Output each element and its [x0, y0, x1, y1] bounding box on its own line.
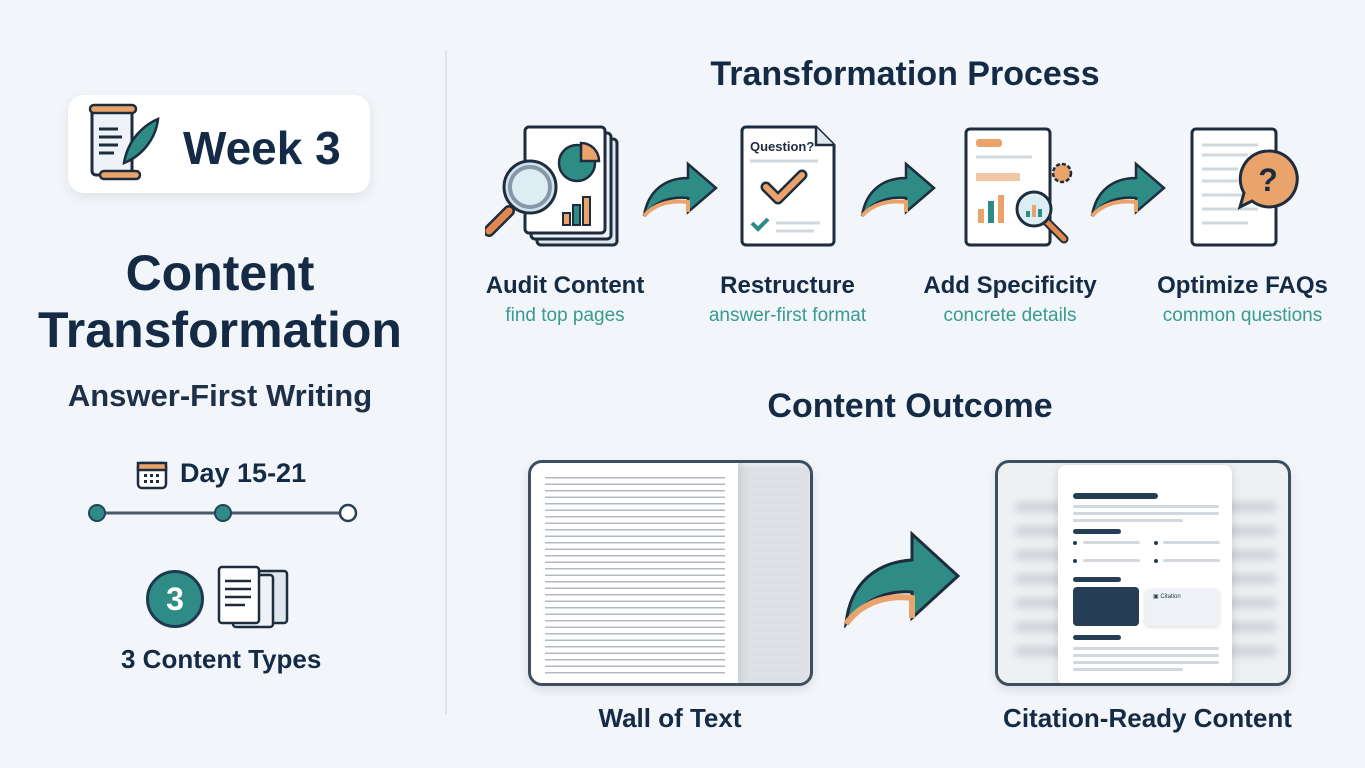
step 2: restructure: Restructure — [720, 272, 855, 299]
week badge — [68, 95, 370, 193]
icon: doc with question bubble: ? — [1258, 162, 1278, 198]
step 1: audit — [485, 126, 644, 326]
title — [38, 245, 402, 358]
caption: wall of text: Wall of Text — [598, 703, 742, 733]
icon: number 3 — [146, 570, 204, 628]
arrow 2 — [860, 161, 936, 218]
step 4: faqs: Optimize FAQs — [1157, 272, 1328, 299]
step 2: restructure — [709, 126, 866, 326]
icon: doc with question bubble — [1190, 128, 1299, 246]
caption: citation ready: Citation-Ready Content — [1003, 703, 1292, 733]
panel: wall of text — [528, 460, 813, 686]
step 3: specificity — [923, 128, 1097, 326]
icon: documents — [218, 566, 288, 628]
step 4: faqs: common questions — [1163, 305, 1322, 326]
step 3: specificity: Add Specificity — [923, 272, 1097, 299]
arrow: big transformation — [844, 530, 960, 628]
icon: number 3: 3 — [166, 581, 184, 617]
icon: question doc: Question? — [750, 139, 814, 154]
icon: doc with chart magnifier — [964, 128, 1072, 246]
day range: Day 15-21 — [180, 458, 306, 488]
icon: question doc — [740, 126, 836, 246]
step 2: restructure: answer-first format — [709, 305, 866, 326]
title: week 3: Week 3 — [183, 122, 341, 174]
heading: content outcome: Content Outcome — [767, 387, 1053, 425]
text block: dense text — [531, 463, 738, 685]
panel: citation ready — [995, 460, 1291, 686]
content types — [121, 566, 321, 674]
arrow 1 — [642, 161, 718, 218]
icon: magnifier docs — [485, 126, 618, 246]
text block: structured doc — [1058, 465, 1232, 685]
title: Transformation — [38, 302, 402, 358]
timeline — [88, 504, 358, 522]
title: Content — [126, 245, 314, 301]
callout: citation card — [1145, 589, 1219, 626]
step 1: audit: Audit Content — [486, 272, 644, 299]
subtitle: Answer-First Writing — [68, 378, 372, 413]
step 1: audit: find top pages — [505, 305, 625, 326]
callout: citation card: ▣ Citation — [1153, 594, 1181, 600]
icon: calendar — [136, 462, 168, 490]
step 3: specificity: concrete details — [943, 305, 1077, 326]
content types: 3 Content Types — [121, 644, 321, 674]
step 4: faqs — [1157, 128, 1328, 326]
heading: transformation process: Transformation Process — [710, 55, 1100, 93]
icon: scroll with quill — [88, 104, 160, 180]
arrow 3 — [1090, 161, 1166, 218]
